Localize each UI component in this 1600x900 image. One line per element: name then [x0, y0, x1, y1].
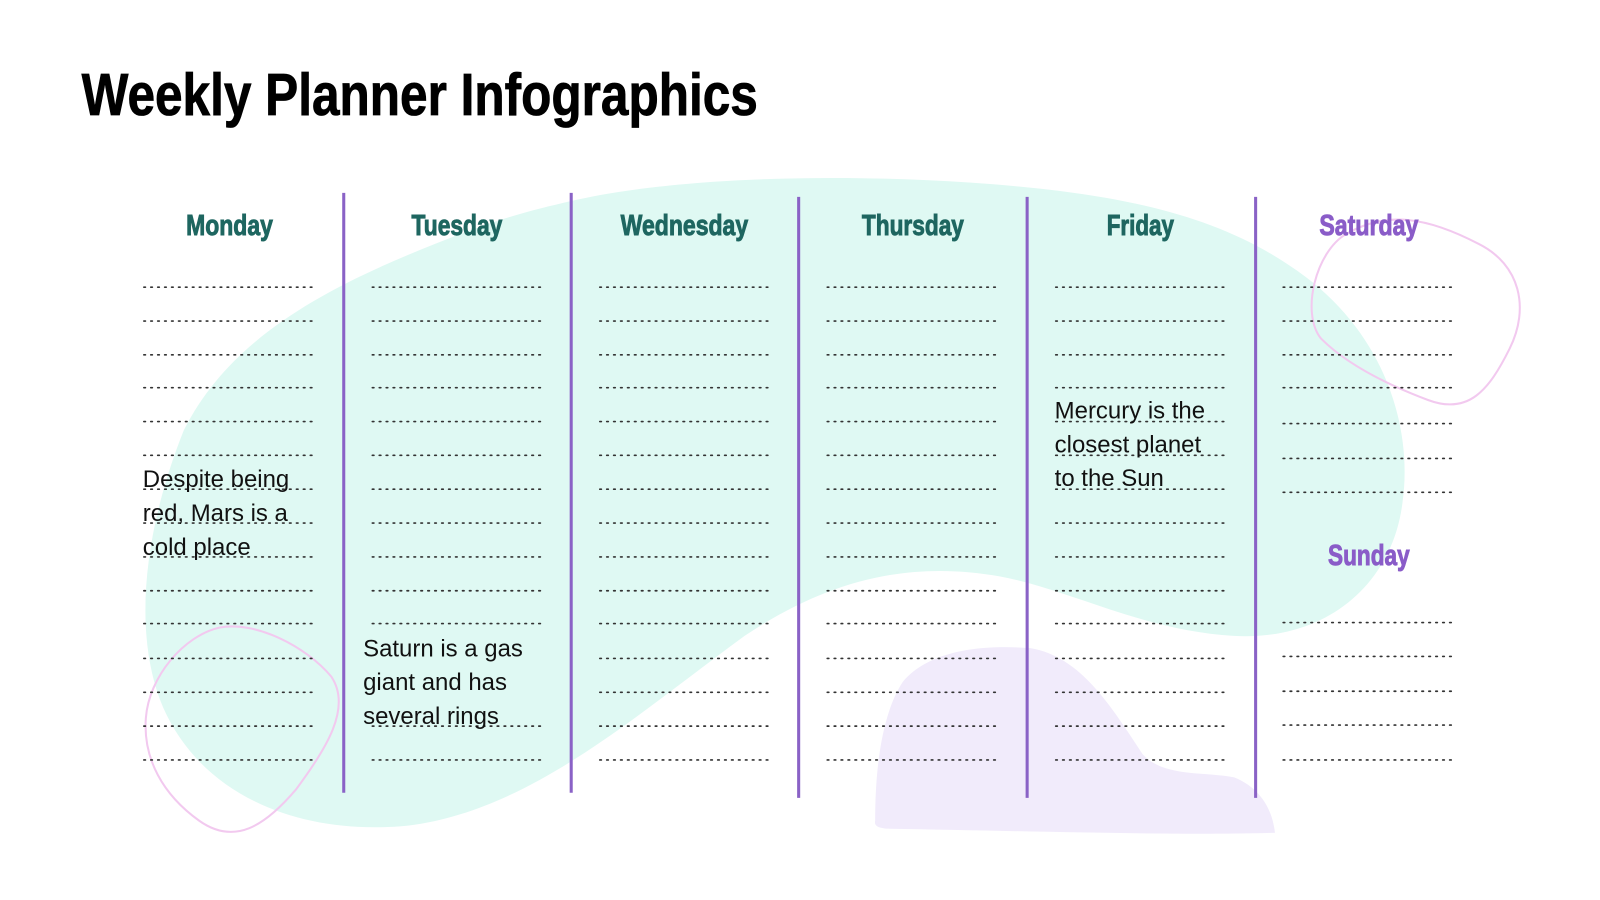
day headings: Wednesday	[621, 210, 748, 242]
day headings: Sunday	[1328, 540, 1410, 572]
note: Tuesday: giant and has	[363, 669, 507, 696]
day headings: Tuesday	[412, 210, 502, 242]
note: Friday: closest planet	[1055, 431, 1201, 458]
note: Monday: red, Mars is a	[143, 500, 289, 527]
day headings: Saturday	[1319, 210, 1418, 242]
dotted writing lines	[144, 287, 1452, 760]
note: Tuesday: several rings	[363, 703, 499, 730]
day headings	[186, 210, 1418, 572]
note: Monday: cold place	[143, 534, 251, 561]
decorative outline blob: left	[146, 626, 339, 832]
note: Tuesday: Saturn is a gas	[363, 635, 523, 662]
day headings: Friday	[1107, 210, 1174, 242]
title: Weekly Planner Infographics	[82, 61, 758, 128]
note: Monday: Despite being	[143, 466, 289, 493]
column dividers	[344, 193, 1256, 798]
background blob: lavender	[875, 647, 1275, 834]
day headings: Monday	[186, 210, 273, 242]
day headings: Thursday	[862, 210, 964, 242]
decorative outline blob: right	[1312, 220, 1520, 404]
note: Friday: Mercury is the	[1055, 397, 1205, 424]
note: Friday: to the Sun	[1055, 465, 1164, 492]
background blob: mint	[145, 178, 1405, 827]
